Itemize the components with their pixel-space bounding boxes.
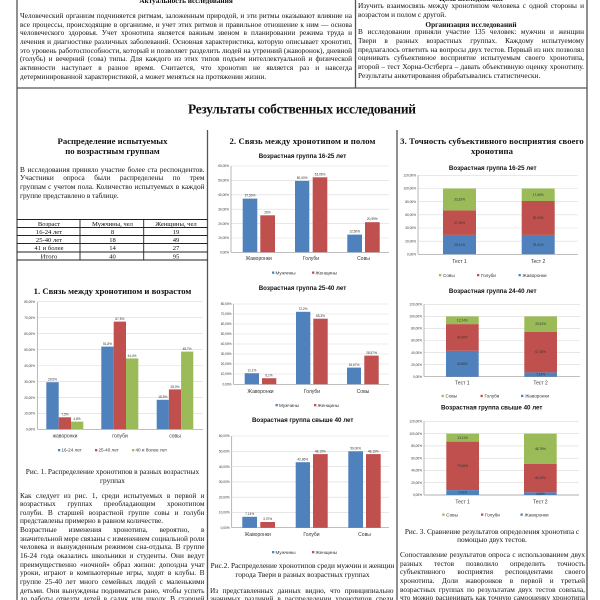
bar chart: sex, age 25-40: Жаворонки [247,389,274,395]
heading: accuracy of self-perception [400,136,584,156]
bar chart: sex, age 25-40: 40,00% [221,342,232,346]
bar chart: sex, age over 40: Совы [358,532,371,538]
bar chart: sex, age 25-40: 50,00% [221,332,232,336]
stacked bar chart: tests, age 24-40: 42,86% [457,362,468,366]
stacked bar chart: tests, age 16-25: 60,00% [405,213,416,217]
bar chart: chronotype by age: 80,00% [24,300,35,304]
bar chart: sex, age 16-25: Возрастная группа 16-25 лет [259,153,346,160]
stacked bar chart: tests, age over 40: 100,00% [409,432,422,436]
text block: figure 3 discussion [400,551,585,600]
stacked bar chart: tests, age over 40: 60,00% [411,456,422,460]
bar chart: sex, age over 40: Жаворонки [245,532,271,538]
figure 3 caption: помощью двух тестов. [457,535,527,544]
stacked bar chart: tests, age 24-40: 44,90% [457,336,468,340]
bar chart: chronotype by age: 25,0% [170,385,180,389]
table: respondents by age and sex [17,219,208,260]
bar chart: sex, age 16-25: 0,00% [220,250,229,254]
bar chart: sex, age over 40: 30,00% [219,480,230,484]
stacked bar chart: tests, age 16-25: Жаворонки [522,273,547,278]
table: respondents by age and sex: Итого [41,253,58,260]
table: respondents by age and sex: 25-40 лет [36,237,62,244]
heading: chronotype and sex: 2. Связь между хронотипом и полом [229,136,376,146]
bar chart: sex, age 25-40: 11,1% [248,368,257,372]
stacked bar chart: tests, age over 40: 4,88% [536,492,545,496]
bar chart: chronotype by age: 4,8% [73,417,81,421]
stacked bar chart: tests, age over 40 [409,404,579,518]
bar chart: chronotype by age: 0,00% [26,428,35,432]
bar chart: sex, age 16-25: 20,99% [367,217,378,221]
stacked bar chart: tests, age over 40: 40,00% [411,469,422,473]
stacked bar chart: tests, age 24-40: Совы [446,394,457,399]
stacked bar chart: tests, age over 40: Совы [446,512,458,517]
stacked bar chart: tests, age 16-25: 40,00% [405,226,416,230]
heading: accuracy of self-perception: 3. Точность субъективного восприятия своего [400,136,584,146]
bar chart: sex, age 25-40: 60,00% [221,322,232,326]
stacked bar chart: tests, age 16-25: Голуби [481,273,496,278]
stacked bar chart: tests, age 16-25: Тест 1 [452,259,467,265]
stacked bar chart: tests, age 16-25: 0,00% [407,252,416,256]
bar chart: sex, age 25-40: Совы [357,389,370,395]
bar chart: chronotype by age: 44,4% [127,354,137,358]
bar chart: sex, age over 40: Голуби [303,532,320,538]
bar chart: sex, age 25-40: Голуби [304,389,320,395]
bar chart: sex, age 25-40: 28,57% [366,351,377,355]
stacked bar chart: tests, age 24-40: Тест 1 [455,380,470,386]
stacked bar chart: tests, age 16-25: 29,41% [533,243,544,247]
stacked bar chart: tests, age 16-25: 37,26% [454,221,465,225]
stacked bar chart: tests, age 24-40: Жаворонки [525,394,549,399]
bar chart: sex, age 16-25: 10,00% [218,236,229,240]
bar chart: sex, age over 40: 60,00% [219,434,230,438]
bar chart: chronotype by age: 60,00% [24,332,35,336]
stacked bar chart: tests, age 24-40 [409,288,580,399]
bar chart: chronotype by age: голуби [112,434,128,440]
stacked bar chart: tests, age 16-25: Совы [443,273,455,278]
text block: relevance [20,12,352,81]
bar chart: sex, age over 40: 40,00% [219,465,230,469]
bar chart: chronotype by age: совы [169,434,181,440]
heading: age group distribution: Распределение испытуемых [58,136,167,146]
stacked bar chart: tests, age 16-25: Тест 2 [531,259,545,265]
bar chart: sex, age over 40: 20,00% [219,495,230,499]
stacked bar chart: tests, age 16-25: 17,65% [533,193,544,197]
bar chart: sex, age 16-25: 12,50% [349,230,360,234]
heading: organization of research: Организация исследований [425,20,517,28]
bar chart: chronotype by age: 20,00% [24,396,35,400]
stacked bar chart: tests, age over 40: Голуби [485,512,500,517]
stacked bar chart: tests, age over 40: 0,00% [413,493,422,497]
figure 3 caption [405,527,579,544]
stacked bar chart: tests, age over 40: 13,11% [457,436,468,440]
bar chart: chronotype by age: 16-24 лет [62,448,83,453]
stacked bar chart: tests, age over 40: 20,00% [411,481,422,485]
stacked bar chart: tests, age 24-40: Голуби [484,394,500,399]
heading: chronotype and age: 1. Связь между хронотипом и возрастом [34,286,191,296]
bar chart: sex, age 16-25: Женщины [316,270,337,275]
text block: age groups intro [20,166,204,200]
bar chart: sex, age 16-25: 26% [264,210,271,214]
bar chart: chronotype by age: 50,00% [24,348,35,352]
bar chart: sex, age 16-25: 50,00% [297,176,308,180]
stacked bar chart: tests, age over 40: 80,00% [411,444,422,448]
stacked bar chart: tests, age over 40: 46,34% [535,476,546,480]
figure 1 caption [26,466,199,484]
bar chart: chronotype by age: 25-40 лет [98,448,120,453]
bar chart: sex, age 25-40: 0,00% [222,382,232,386]
bar chart: chronotype by age: 10,00% [24,412,35,416]
table: respondents by age and sex: Возраст [38,221,60,228]
bar chart: chronotype by age: 67,5% [115,317,124,321]
stacked bar chart: tests, age 16-25: 33,33% [454,198,465,202]
table: respondents by age and sex: 8 [111,229,115,236]
bar chart: chronotype by age: 40,00% [24,364,35,368]
bar chart: sex, age 16-25: 40,00% [218,193,229,197]
bar chart: chronotype by age: 48,7% [182,347,192,351]
stacked bar chart: tests, age 24-40: 80,00% [411,327,422,331]
bar chart: sex, age 25-40: Возрастная группа 25-40 лет [259,285,346,292]
stacked bar chart: tests, age 16-25: 20,00% [405,239,416,243]
table: respondents by age and sex: 40 [109,253,116,260]
stacked bar chart: tests, age 16-25: 100,00% [403,187,416,191]
text block: goal [358,2,584,19]
table: respondents by age and sex: 41 и более [34,245,64,252]
figure 1 caption: группах [100,476,125,484]
stacked bar chart: tests, age over 40: 48,78% [535,447,546,451]
bar chart: chronotype by age: 18,5% [158,395,167,399]
bar chart: sex, age 25-40: 30,00% [221,352,232,356]
stacked bar chart: tests, age 24-40: 12,24% [457,318,468,322]
stacked bar chart: tests, age 24-40: Тест 2 [533,380,548,386]
bar chart: sex, age 16-25: 60,00% [218,164,229,168]
stacked bar chart: tests, age 24-40: 25,51% [535,322,546,326]
bar chart: sex, age 25-40: 10,00% [221,372,232,376]
bar chart: sex, age over 40: 42,86% [297,457,308,461]
bar chart: sex, age over 40: 50,00% [350,446,361,450]
bar chart: sex, age 16-25: Жаворонки [246,256,272,262]
stacked bar chart: tests, age 16-25: 52,94% [533,216,544,220]
stacked bar chart: tests, age 16-25: 29,41% [454,243,465,247]
figure 2 caption: города Твери в разных возрастных группах [235,570,370,579]
bar chart: sex, age 16-25: 20,00% [218,222,229,226]
stacked bar chart: tests, age 24-40: 100,00% [409,315,422,319]
figure 2 caption: Рис.2. Распределение хронотипов среди мужчин и женщин [211,561,394,570]
bar chart: chronotype by age: 29,5% [48,378,57,382]
stacked bar chart: tests, age 16-25: 120,00% [403,174,416,178]
stacked bar chart: tests, age over 40: Возрастная группа свыше 40 лет [441,404,542,412]
stacked bar chart: tests, age 24-40: 60,00% [411,339,422,343]
bar chart: sex, age 25-40: 6,1% [265,374,273,378]
stacked bar chart: tests, age over 40: Тест 1 [455,500,470,506]
table: respondents by age and sex: 16-24 лет [36,229,62,236]
table: respondents by age and sex: 95 [173,253,180,260]
table: respondents by age and sex: 27 [173,245,180,252]
bar chart: sex, age 16-25: Совы [357,256,370,262]
figure 3 caption: Рис. 3. Сравнение результатов определения хронотипа с [405,527,579,536]
table: respondents by age and sex: 14 [109,245,116,252]
stacked bar chart: tests, age over 40: 120,00% [409,420,422,424]
bar chart: chronotype by age: 70,00% [24,316,35,320]
stacked bar chart: tests, age over 40: 79,48% [457,464,468,468]
heading: accuracy of self-perception: хронотипа [471,146,513,156]
bar chart: sex, age 25-40: 65,3% [316,314,325,318]
stacked bar chart: tests, age 24-40: 7,14% [536,373,545,377]
bar chart: sex, age over 40: Женщины [316,550,337,555]
stacked bar chart: tests, age 24-40: 20,00% [411,363,422,367]
bar chart: sex, age 16-25: 50,00% [218,178,229,182]
bar chart: chronotype by age [24,300,203,453]
text block: figure 1 discussion [20,492,204,600]
bar chart: sex, age 16-25: 37,50% [245,194,256,198]
table: respondents by age and sex: 19 [173,229,180,236]
bar chart: sex, age 16-25: 53,06% [315,172,326,176]
bar chart: chronotype by age: 30,00% [24,380,35,384]
figure 2 caption [210,561,394,579]
bar chart: chronotype by age: жаворонки [53,434,78,440]
heading: age group distribution: по возрастным группам [65,146,160,156]
text block: figure 2 discussion [210,587,394,600]
figure 1 caption: Рис. 1. Распределение хронотипов в разных возрастных [26,466,199,476]
table: respondents by age and sex: Мужчины, чел [92,221,134,228]
bar chart: sex, age 25-40: Женщины [318,403,339,408]
stacked bar chart: tests, age 24-40: 120,00% [409,302,422,306]
stacked bar chart: tests, age 24-40: 0,00% [413,375,422,379]
heading: age group distribution [58,136,168,156]
text block: organization of research [358,28,584,80]
bar chart: sex, age 25-40: Мужчины [279,403,299,408]
bar chart: sex, age 25-40: 70,00% [221,312,232,316]
stacked bar chart: tests, age over 40: Жаворонки [524,512,549,517]
bar chart: sex, age 25-40: 72,2% [298,307,308,311]
bar chart: sex, age 25-40: 16,67% [349,363,360,367]
bar chart: sex, age 16-25: Голуби [303,256,319,262]
stacked bar chart: tests, age 24-40: Возрастная группа 24-40 лет [449,288,536,295]
bar chart: chronotype by age: 7,5% [61,412,69,416]
bar chart: chronotype by age: 51,8% [103,342,112,346]
bar chart: sex, age over 40: 3,70% [263,517,272,521]
bar chart: sex, age over 40: 10,00% [219,511,230,515]
table: respondents by age and sex: 49 [173,237,180,244]
stacked bar chart: tests, age 16-25: Возрастная группа 16-25 лет [449,165,536,172]
bar chart: sex, age 16-25: 30,00% [218,207,229,211]
bar chart: sex, age over 40: 48,15% [315,449,326,453]
bar chart: sex, age 25-40: 20,00% [221,362,232,366]
table: respondents by age and sex: Женщины, чел [155,221,197,228]
stacked bar chart: tests, age over 40: Тест 2 [533,500,548,506]
bar chart: chronotype by age: 40 и более лет [136,448,168,453]
stacked bar chart: tests, age 16-25 [403,165,578,278]
bar chart: sex, age over 40: 0,00% [221,526,230,530]
bar chart: sex, age 25-40: 80,00% [221,302,232,306]
bar chart: sex, age over 40: Мужчины [276,550,296,555]
bar chart: sex, age over 40 [218,417,389,555]
bar chart: sex, age 16-25 [218,153,389,276]
bar chart: sex, age over 40: 50,00% [219,450,230,454]
bar chart: sex, age over 40: 48,15% [368,449,379,453]
bar chart: sex, age 16-25: Мужчины [276,270,296,275]
stacked bar chart: tests, age 24-40: 67,35% [535,350,546,354]
main title: Результаты собственных исследований [188,101,416,116]
table: respondents by age and sex: 18 [109,237,116,244]
stacked bar chart: tests, age 24-40: 40,00% [411,351,422,355]
bar chart: sex, age 25-40 [220,285,389,408]
stacked bar chart: tests, age over 40: 7,41% [458,491,467,495]
bar chart: sex, age over 40: Возрастная группа свыше 40 лет [252,417,353,424]
stacked bar chart: tests, age 16-25: 80,00% [405,200,416,204]
bar chart: sex, age over 40: 7,14% [245,512,254,516]
